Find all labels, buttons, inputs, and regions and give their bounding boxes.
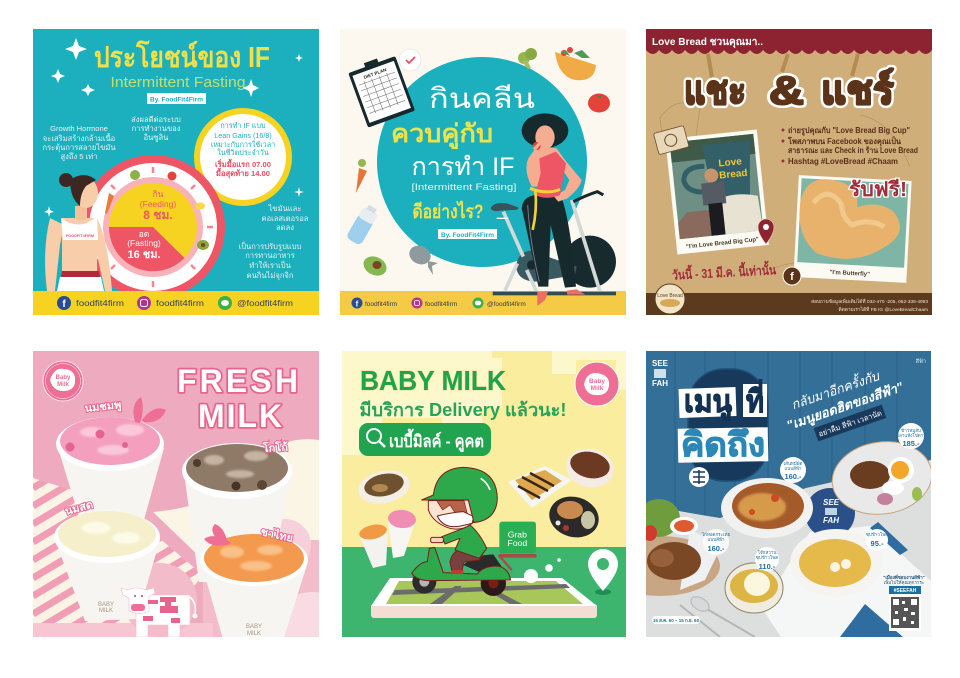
title block: ดีอย่างไร? [412, 200, 484, 223]
icon: location pin [588, 549, 618, 595]
badge: by FoodFit4Firm: By. FoodFit4Firm [441, 232, 494, 239]
logo: See Fah coaster: SEE [823, 498, 840, 507]
header: invitation banner: Love Bread ชวนคุณมา.. [652, 36, 763, 49]
logo: Baby Milk: Milk [591, 385, 604, 392]
text: eating habit benefit: เป็นการปรับรูปแบบ [239, 241, 302, 251]
footer: contact bar [646, 293, 932, 315]
logo: Baby Milk: Baby [56, 375, 71, 381]
list: campaign steps: สาธารณะ และ Check in ร้าน Love Bread [788, 145, 918, 155]
illustration: delivery rider: Food [507, 538, 527, 548]
subtitle: delivery available: มีบริการ Delivery แล้วนะ! [360, 400, 566, 420]
title: Baby Milk: BABY MILK [360, 365, 506, 396]
icon: diet plan clipboard [347, 52, 415, 128]
price tags: 95.- [871, 539, 884, 548]
text: eating habit benefit: คนกินไม่จุกจิก [247, 271, 293, 280]
icon: broccoli [518, 48, 537, 69]
text: growth hormone benefit: Growth Hormone [50, 124, 108, 133]
label: dates: 15 ส.ค. 60 – 15 ก.ย. 60 [653, 618, 700, 623]
title: missed menu: เมนู [684, 384, 732, 421]
decorative exhaust puffs [524, 558, 561, 583]
cutlery [680, 594, 755, 637]
icon: water bottle [347, 205, 377, 244]
logo: Love Bread [655, 284, 685, 314]
title: snap and share: แชะ [684, 69, 746, 113]
text: growth hormone benefit: จะเสริมสร้างกล้ามเนื้อ [43, 133, 115, 143]
chart: clock pie 16/8: (Feeding) [140, 199, 176, 209]
title: snap and share: แชร์ [821, 68, 894, 113]
panel: fresh milk [33, 351, 352, 672]
illustration: delivery rider: Grab [508, 529, 527, 539]
photo: butterfly pastry [793, 175, 912, 283]
icon: map pin [758, 219, 774, 244]
callout: Lean Gains circle: Lean Gains (16/8) [214, 131, 272, 140]
title block: ควบคู่กับ [391, 120, 493, 150]
icon: salad bowl [555, 47, 596, 80]
chart: clock pie 16/8: 8 ชม. [143, 208, 173, 222]
callout: Lean Gains circle: มื้อสุดท้าย 14.00 [216, 167, 270, 179]
price tags: 110.- [759, 562, 776, 571]
list: campaign steps: ถ่ายรูปคุณกับ "Love Bread Big Cup" [788, 126, 910, 136]
price tags: ไก่ทอดกระเทย [701, 532, 731, 537]
logo: Baby Milk [43, 361, 83, 401]
title: snap and share [684, 68, 894, 113]
bar: social links: foodfit4firm [76, 299, 124, 308]
photo: butterfly pastry: "I'm Butterfly" [829, 270, 870, 278]
title: snap and share: แชร์ [821, 68, 894, 113]
photo: Love Bread Big Cup: Bread [719, 168, 748, 182]
QR code block: #SEEFAH [894, 588, 917, 594]
bar: social links: foodfit4firm [425, 301, 457, 308]
plate: fried pork [600, 499, 722, 596]
illustration: cow [121, 588, 198, 637]
background: table and paper [646, 460, 931, 637]
search bar [359, 423, 491, 456]
text: growth hormone benefit: สูงถึง 5 เท่า [61, 152, 97, 161]
text: insulin benefit: ส่งผลดีต่อระบบ [131, 115, 181, 124]
title: fresh milk: FRESH [177, 363, 298, 399]
cup: plain milk [54, 511, 160, 621]
logo: Baby Milk [575, 362, 619, 406]
title block [391, 83, 535, 223]
price tags: 160.- [784, 472, 802, 481]
plate: spicy salad [721, 478, 813, 538]
headline: return of best sellers: "เมนูยอดฮิตของสีฟ้า" [785, 379, 906, 434]
icon: camera [653, 126, 689, 155]
figure: woman [45, 173, 112, 291]
icon: check bubble [399, 49, 421, 71]
labels: flavour names [64, 399, 294, 545]
food: noodle soup bowl [563, 444, 617, 492]
icon: round emblem [689, 467, 709, 487]
title: fresh milk [177, 363, 298, 434]
QR code block: เพิ่มไปให้คุณทุกวาระ [884, 579, 924, 586]
food: pad thai plate [545, 491, 603, 543]
ground [342, 547, 626, 637]
callout: Lean Gains circle [194, 108, 292, 206]
illustration: woman with tape [522, 113, 585, 306]
bar: social links [340, 291, 626, 315]
cup: thai tea [200, 534, 308, 650]
badge: by FoodFit4Firm: By. FoodFit4Firm [150, 96, 203, 104]
text: cholesterol benefit: คอเลสเตอรอล [262, 214, 309, 223]
headline: return of best sellers [778, 360, 906, 434]
icon: diet plan clipboard: DIET PLAN [363, 67, 387, 80]
chart: clock pie 16/8: 16 ชม. [127, 249, 161, 261]
price tags: 160.- [707, 544, 725, 553]
title: fresh milk: MILK [198, 398, 282, 434]
text: cholesterol benefit: ไขมันและ [268, 204, 301, 213]
bar: social links: @foodfit4firm [237, 299, 293, 308]
list: campaign steps [782, 126, 918, 166]
QR code block: "เมืองพี่ชอบงานสีฟ้า" [883, 574, 925, 580]
labels: flavour names: นมชมพู [84, 399, 122, 416]
title: snap and share: แชะ [684, 69, 746, 113]
footer: contact bar: ติดตามเราได้ที่ FB IG @LoveBreadChaam [838, 306, 928, 313]
icon: fish [409, 246, 438, 275]
background: cream wave [153, 439, 319, 560]
icon: avocado [364, 256, 386, 276]
bowl: ice cream [725, 563, 783, 613]
icons: sparkles [44, 38, 304, 217]
text: eating habit benefit: การทานอาหาร [245, 251, 295, 260]
text: growth hormone benefit [42, 124, 116, 161]
text: insulin benefit: การทำงานของ [132, 124, 181, 133]
list: campaign steps: โพสภาพบน Facebook ของคุณเป็น [787, 135, 902, 147]
cup: thai tea: BABY [246, 624, 262, 630]
cup: pink milk [56, 417, 164, 520]
text: cholesterol benefit: ลดลง [276, 223, 294, 232]
header: invitation banner [646, 29, 932, 54]
logo: Baby Milk: Baby [589, 378, 605, 385]
title: snap and share: & [769, 69, 804, 113]
title: missed menu: ที่ [746, 379, 764, 419]
decorative milk splashes [133, 397, 230, 546]
price tags: 185.- [902, 439, 920, 448]
label: free: รับฟรี! [849, 178, 907, 201]
food: chocolate toast [508, 466, 572, 508]
text: eating habit benefit [239, 241, 302, 280]
photo: Love Bread Big Cup [665, 130, 769, 254]
price tags [701, 423, 926, 571]
food: milk cups [358, 509, 417, 568]
callout: Lean Gains circle: เหมาะกับการใช้เวลา [211, 140, 275, 149]
bar: social links: f [356, 300, 359, 308]
callout: Lean Gains circle: ในชีวิตประจำวัน [217, 148, 269, 157]
icon: facebook badge: f [790, 271, 794, 283]
labels: flavour names: โกโก้ [261, 440, 289, 455]
photo: Love Bread Big Cup: Love [718, 156, 743, 170]
QR code block [883, 574, 925, 631]
logo: See Fah: SEE [652, 359, 669, 368]
background: wood planks [675, 351, 897, 520]
logo: See Fah coaster [805, 488, 855, 538]
labels: flavour names: นมสด [64, 499, 94, 518]
illustration: phone map road [371, 578, 597, 618]
title: benefits of IF: ประโยชน์ของ IF [94, 39, 270, 74]
search bar: เบบี้มิลค์ - คูคต [389, 428, 484, 453]
footer: contact bar: สอบถามข้อมูลเพิ่มเติมได้ที่ 032-470 -205, 062-339-4993 [811, 298, 928, 305]
labels: flavour names: ชาไทย [259, 524, 294, 545]
photo: Love Bread Big Cup: "I'm Love Bread Big Cup" [686, 237, 759, 251]
cup: plain milk: BABY [98, 602, 114, 608]
bowl: congee [790, 529, 882, 597]
figure: woman: FOODFIT4FIRM [66, 234, 94, 238]
illustration: exercise bike [491, 192, 616, 295]
price tags: ซุปข้าวโพด [866, 531, 888, 538]
price tags: เส้นหมี่ผัด [784, 460, 803, 466]
title block: กินคลีน [429, 83, 535, 114]
logo: See Fah coaster: FAH [823, 516, 839, 525]
callout: Lean Gains circle: การทำ IF แบบ [220, 121, 266, 130]
logo: See Fah [652, 359, 669, 388]
label: dates [652, 616, 700, 624]
background: pink blobs [33, 519, 352, 672]
circle backdrop [377, 57, 587, 267]
chart: clock pie 16/8: (Fasting) [127, 238, 161, 248]
title block: การทำ IF [412, 153, 514, 181]
badge: by FoodFit4Firm [438, 229, 497, 239]
bar: social links: foodfit4firm [156, 299, 204, 308]
panel: baby milk delivery [342, 350, 626, 637]
panel: Love Bread campaign [646, 29, 932, 315]
panel: clean eating with IF [340, 29, 626, 315]
illustration: delivery rider [412, 467, 537, 596]
bar: social links: f [62, 299, 66, 310]
icon: facebook badge [783, 267, 801, 285]
price tags: โจ๊กหวาน [758, 549, 776, 555]
cup: cocoa [182, 443, 292, 582]
title block: [Intermittent Fasting] [412, 182, 516, 193]
food: noodle bowl left [355, 466, 413, 508]
price tags: แบบสีฟ้า [707, 537, 725, 542]
text: insulin benefit [131, 115, 181, 142]
panel: benefits of IF [33, 29, 319, 315]
decorative ropes [708, 54, 858, 78]
text: campaign dates: วันนี้ - 31 มี.ค. นี้เท่านั้น [672, 259, 776, 283]
subtitle: Intermittent Fasting: Intermittent Fasting [110, 75, 246, 91]
backdrop: dark blue shape [688, 369, 768, 481]
text: eating habit benefit: ทำให้เราเป็น [249, 260, 291, 270]
chart: clock pie 16/8: อด [139, 229, 149, 239]
plate: minced meat rice [827, 435, 937, 521]
text: growth hormone benefit: กระตุ้นการสลายไขมัน [42, 143, 116, 152]
price tags: ปลาแห้งไข่ดาว [896, 433, 926, 438]
price tags: แบบสีฟ้า [784, 466, 802, 471]
list: campaign steps: Hashtag #LoveBread #Chaam [788, 157, 898, 166]
icon: tomato [588, 94, 610, 112]
text: insulin benefit: อินซูลิน [143, 133, 168, 142]
logo: Love Bread: Love Bread [657, 293, 683, 299]
logo: Baby Milk: Milk [57, 382, 69, 388]
chart: clock pie 16/8 [81, 155, 225, 299]
callout: Lean Gains circle: เริ่มมื้อแรก 07.00 [215, 158, 271, 169]
headline: return of best sellers: กลับมาอีกครั้งกับ [789, 366, 883, 412]
text: brand small: สีฟ้า [915, 358, 926, 365]
background: stripes [33, 368, 233, 650]
badge: by FoodFit4Firm [147, 93, 206, 104]
title: snap and share: & [769, 69, 804, 113]
cup: plain milk: MILK [99, 608, 113, 614]
bar: social links: @foodfit4firm [487, 301, 526, 308]
bar: social links: foodfit4firm [365, 301, 397, 308]
bar: social links [33, 291, 319, 315]
background: city skyline [342, 350, 626, 470]
cup: thai tea: MILK [247, 631, 261, 637]
price tags: ซุปข้าวโพด [756, 554, 778, 561]
chart: clock pie 16/8: กิน [153, 189, 164, 199]
decorative pastry sketches [660, 103, 910, 273]
title: missed menu [678, 379, 768, 463]
price tags: ข้าวหมูสับ [901, 428, 921, 434]
text: cholesterol benefit [262, 204, 309, 232]
title: missed menu: คิดถึง [681, 426, 765, 463]
ribbon: don't miss: อย่าลืม สีฟ้า เวลานัด [817, 408, 883, 439]
icon: carrot [356, 159, 367, 193]
panel: See Fah menu [600, 351, 937, 637]
logo: See Fah: FAH [652, 379, 668, 388]
